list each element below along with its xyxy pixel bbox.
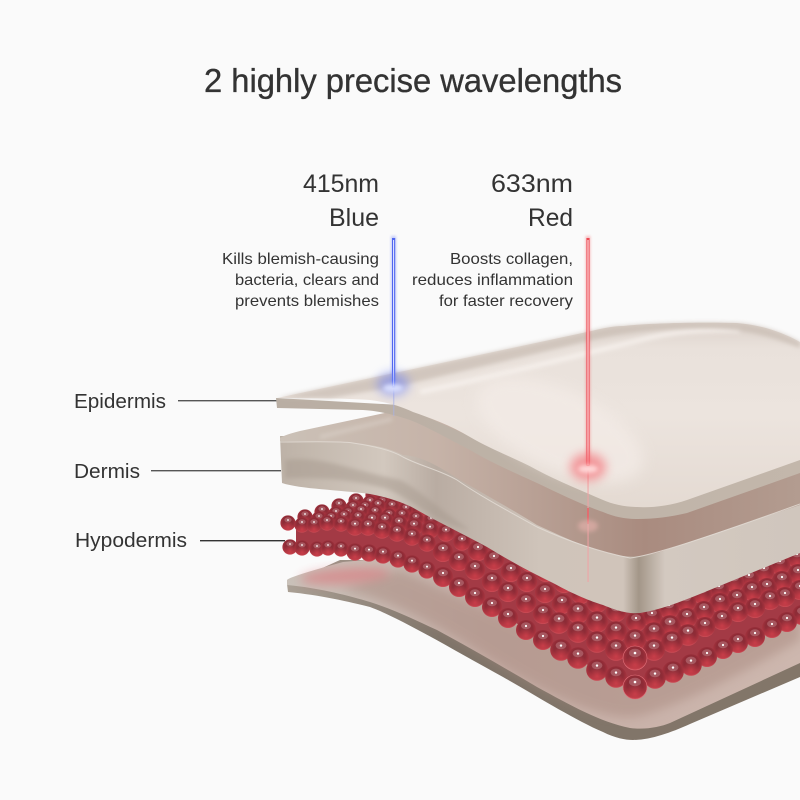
under fill [296, 495, 800, 687]
text block: blue wavelength: 415nm [303, 170, 379, 198]
layer: dermis [280, 360, 800, 613]
label: epidermis: Epidermis [74, 391, 166, 413]
dermis front face [280, 436, 800, 613]
text block: red wavelength: reduces inflammation [412, 272, 573, 289]
epidermis top surface [277, 323, 800, 507]
beam: red light [570, 236, 606, 582]
label: dermis: Dermis [74, 461, 140, 483]
text block: red wavelength: Red [528, 204, 573, 232]
layer: bottom sheet [287, 520, 800, 740]
epidermis warm glow [462, 356, 658, 504]
dermis top surface [280, 360, 800, 556]
upper back rows [297, 487, 800, 651]
label: hypodermis: Hypodermis [75, 530, 187, 552]
bottom sheet edge [287, 560, 800, 740]
upper front row of spheres [280, 515, 800, 670]
layer: hypodermis spheres [280, 487, 800, 699]
bottom sheet surface [287, 520, 800, 729]
text block: blue wavelength: Kills blemish-causing [222, 251, 379, 268]
bottom sheet shadow [340, 570, 800, 717]
layer: epidermis [276, 323, 800, 519]
text block: red wavelength [412, 170, 573, 310]
text block: blue wavelength: bacteria, clears and [235, 272, 379, 289]
text block: red wavelength: 633nm [491, 170, 573, 198]
text block: blue wavelength [222, 170, 379, 310]
title: 2 highly precise wavelengths [204, 62, 622, 99]
epidermis rim shade [277, 323, 800, 398]
lower row of spheres [282, 539, 800, 699]
epidermis side edge [276, 398, 800, 519]
epidermis light ridge [420, 330, 740, 392]
bottom sheet red reflection [300, 565, 390, 587]
beam: blue light [377, 236, 409, 416]
text block: blue wavelength: prevents blemishes [235, 293, 379, 310]
text block: blue wavelength: Blue [329, 204, 379, 232]
dermis soft reflections [285, 459, 470, 530]
text block: red wavelength: Boosts collagen, [450, 251, 573, 268]
text block: red wavelength: for faster recovery [439, 293, 573, 310]
dermis edge highlight [280, 442, 800, 558]
